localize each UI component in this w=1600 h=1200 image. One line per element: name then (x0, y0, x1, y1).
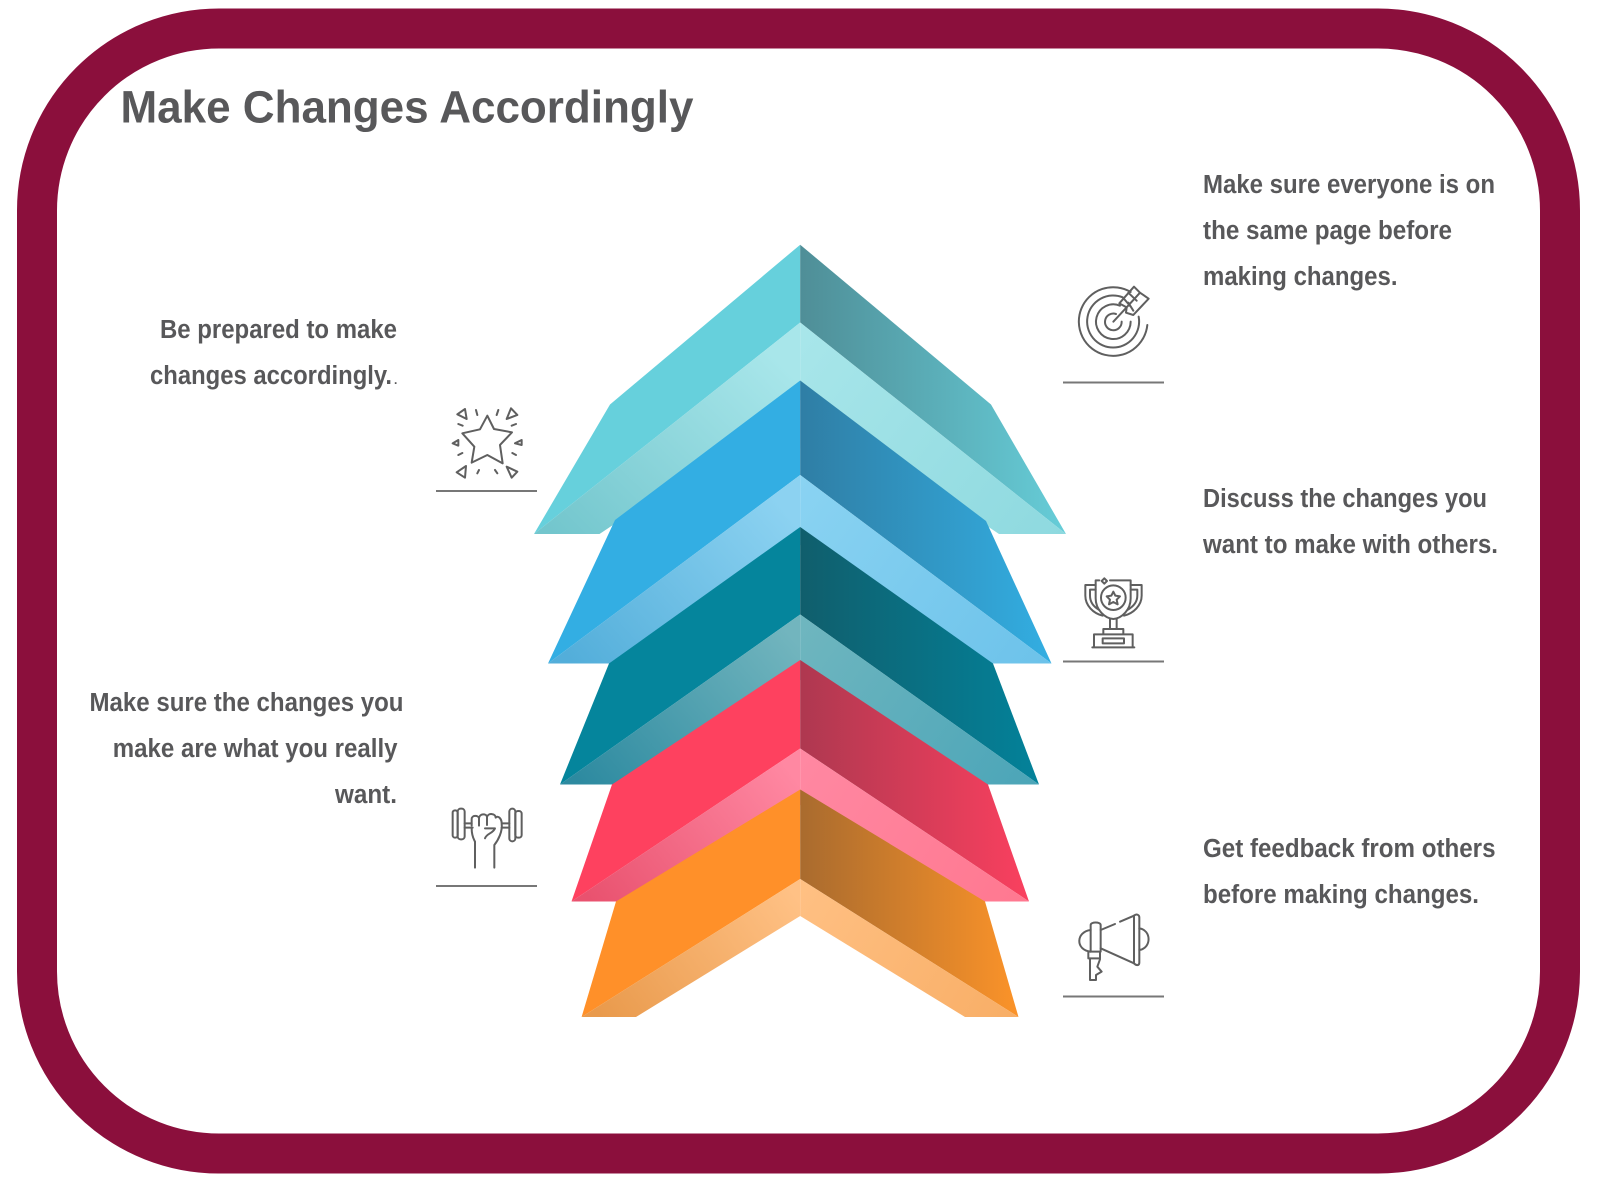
icon: megaphone (1079, 915, 1149, 980)
arrow layer 2: blue (548, 380, 1052, 664)
text block: discuss changes: Discuss the changes you (1203, 485, 1487, 513)
text block: get feedback: Get feedback from others (1203, 835, 1496, 863)
text block: be prepared: changes accordingly. (150, 362, 392, 390)
divider under megaphone icon (1063, 996, 1164, 998)
title: Make Changes Accordingly (120, 82, 694, 132)
layered arrow diagram (534, 245, 1066, 1017)
arrow layer 4: red (572, 660, 1029, 902)
text block: everyone on same page: the same page before (1203, 217, 1452, 245)
divider under star icon (436, 490, 537, 492)
divider under trophy icon (1063, 660, 1164, 662)
text block: everyone on same page: making changes. (1203, 263, 1398, 291)
text block: discuss changes: want to make with others. (1202, 531, 1498, 559)
text block: be prepared: . (394, 373, 397, 387)
text block: be prepared: Be prepared to make (160, 316, 397, 344)
text block: discuss changes (1202, 485, 1498, 559)
text block: get feedback: before making changes. (1203, 881, 1479, 909)
arrow layer 3: dark teal (560, 527, 1039, 784)
icon: target with arrow (1079, 287, 1149, 356)
icon: trophy (1085, 578, 1142, 647)
divider under target icon (1063, 382, 1164, 384)
text block: make sure changes: make are what you really (113, 735, 398, 763)
text block: make sure changes: want. (334, 781, 397, 809)
arrow layer 1: light teal (534, 245, 1066, 534)
text block: get feedback (1203, 835, 1496, 909)
icon: star with sparkles (453, 408, 522, 478)
arrow layer 5: orange (582, 790, 1018, 1017)
text block: make sure changes (90, 689, 404, 809)
icon: fist with dumbbell (453, 809, 522, 868)
text block: everyone on same page (1203, 171, 1495, 291)
text block: be prepared (150, 316, 397, 390)
text block: make sure changes: Make sure the changes you (90, 689, 404, 717)
text block: everyone on same page: Make sure everyone is on (1203, 171, 1495, 199)
divider under dumbbell icon (436, 885, 537, 887)
